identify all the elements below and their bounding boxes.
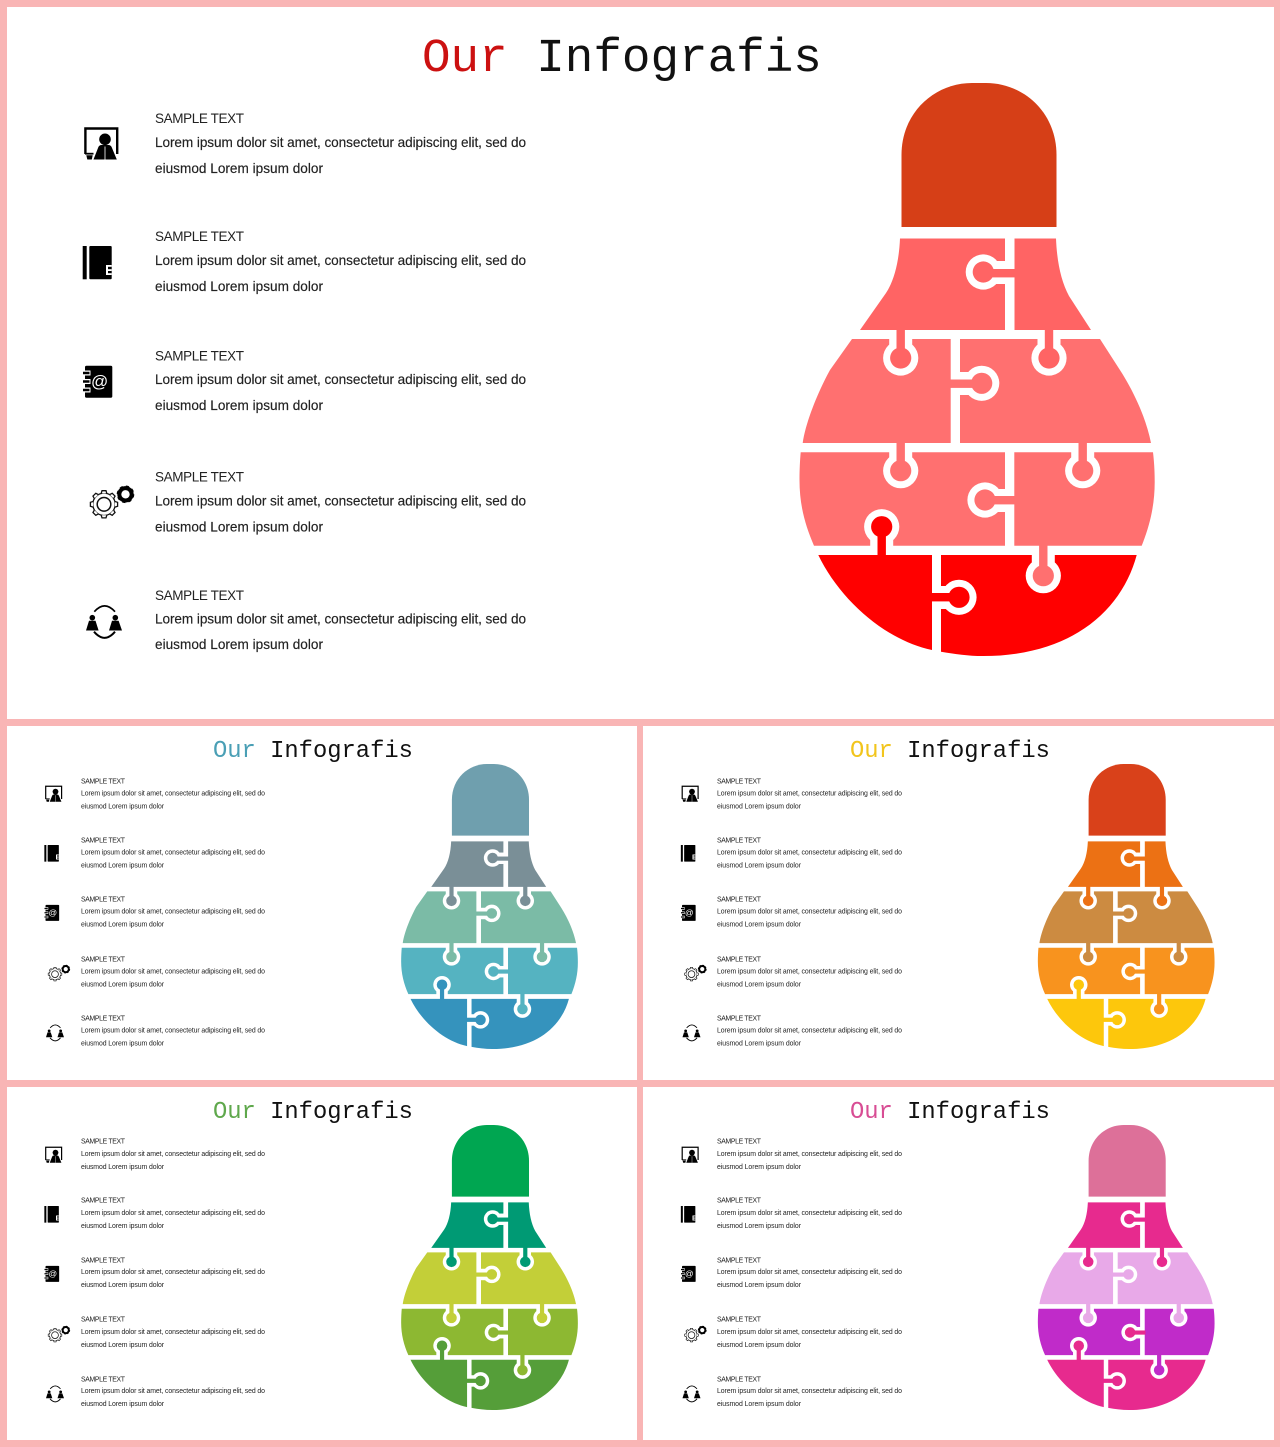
list item 1 xyxy=(682,778,902,810)
list item 1 xyxy=(46,1138,265,1171)
bulb neck pieces xyxy=(860,238,1091,330)
list item 4: SAMPLE TEXT xyxy=(717,1316,762,1324)
panel: pink slide xyxy=(643,1087,1274,1440)
list item 3: SAMPLE TEXT xyxy=(81,1258,126,1264)
list item 2: eiusmod Lorem ipsum dolor xyxy=(81,1223,165,1230)
list item 5 xyxy=(46,1016,265,1048)
list item 2: SAMPLE TEXT xyxy=(717,838,762,844)
bulb cap xyxy=(902,83,1056,227)
list item 2 xyxy=(83,229,526,294)
list item 3 xyxy=(44,1258,265,1289)
list item 2: SAMPLE TEXT xyxy=(155,229,244,244)
row 3 puzzle tabs xyxy=(1033,544,1054,586)
list item 1: Lorem ipsum dolor sit amet, consectetur adipiscing elit, sed do xyxy=(81,790,265,798)
list item 3: @ xyxy=(685,1268,694,1278)
neck puzzle tabs xyxy=(890,261,1060,369)
list item 2: Lorem ipsum dolor sit amet, consectetur adipiscing elit, sed do xyxy=(717,1210,902,1217)
list item 2 xyxy=(681,1198,902,1230)
puzzle light bulb: red xyxy=(800,83,1155,656)
list item 1: eiusmod Lorem ipsum dolor xyxy=(717,804,802,810)
list item 3: SAMPLE TEXT xyxy=(155,348,244,364)
puzzle light bulb: pink xyxy=(1038,1125,1215,1410)
list item 2 xyxy=(681,838,902,870)
row 4 puzzle tabs xyxy=(871,516,970,608)
title: Our Infografis xyxy=(213,1099,413,1126)
list item 2: SAMPLE TEXT xyxy=(81,838,126,844)
list item 5: SAMPLE TEXT xyxy=(81,1376,126,1384)
list item 1: Lorem ipsum dolor sit amet, consectetur adipiscing elit, sed do xyxy=(81,1151,265,1158)
list item 4: Lorem ipsum dolor sit amet, consectetur adipiscing elit, sed do xyxy=(155,494,526,508)
list item 2: Lorem ipsum dolor sit amet, consectetur adipiscing elit, sed do xyxy=(81,850,265,856)
list item 4: SAMPLE TEXT xyxy=(155,470,244,484)
list item 2: SAMPLE TEXT xyxy=(81,1198,126,1204)
bulb row 3 pieces xyxy=(800,452,1155,546)
list item 5: Lorem ipsum dolor sit amet, consectetur adipiscing elit, sed do xyxy=(81,1028,265,1034)
list item 3: eiusmod Lorem ipsum dolor xyxy=(717,922,802,928)
list item 5: SAMPLE TEXT xyxy=(717,1376,762,1384)
list item 3: @ xyxy=(685,908,694,918)
list item 2: Lorem ipsum dolor sit amet, consectetur adipiscing elit, sed do xyxy=(155,253,526,268)
list item 5 xyxy=(682,1016,902,1048)
list item 3: eiusmod Lorem ipsum dolor xyxy=(717,1282,802,1289)
list item 2: eiusmod Lorem ipsum dolor xyxy=(717,862,802,870)
list item 4 xyxy=(90,470,526,534)
panel: orange slide xyxy=(643,726,1274,1080)
list item 1: SAMPLE TEXT xyxy=(81,778,126,786)
interlock tab into row 3 xyxy=(974,489,1016,511)
list item 3: Lorem ipsum dolor sit amet, consectetur adipiscing elit, sed do xyxy=(717,1269,902,1276)
list item 1: Lorem ipsum dolor sit amet, consectetur adipiscing elit, sed do xyxy=(155,135,526,150)
list item 2 xyxy=(44,1198,265,1230)
list item 1 xyxy=(85,111,526,176)
list item 4 xyxy=(48,956,265,988)
list item 1 xyxy=(682,1138,902,1171)
list item 5: SAMPLE TEXT xyxy=(81,1016,126,1022)
list item 3: @ xyxy=(91,372,108,391)
list item 5: Lorem ipsum dolor sit amet, consectetur adipiscing elit, sed do xyxy=(717,1028,902,1034)
list item 4: SAMPLE TEXT xyxy=(81,956,126,964)
list item 4: eiusmod Lorem ipsum dolor xyxy=(81,1342,165,1349)
list item 1: Lorem ipsum dolor sit amet, consectetur adipiscing elit, sed do xyxy=(717,1151,902,1158)
panel: main slide xyxy=(7,7,1274,719)
list item 1: SAMPLE TEXT xyxy=(81,1138,126,1146)
puzzle light bulb: blue xyxy=(401,764,578,1049)
list item 4: eiusmod Lorem ipsum dolor xyxy=(81,982,165,988)
list item 2: eiusmod Lorem ipsum dolor xyxy=(155,279,323,294)
title: Our Infografis xyxy=(850,1099,1050,1126)
list item 5: eiusmod Lorem ipsum dolor xyxy=(155,637,323,652)
list item 3 xyxy=(83,348,526,413)
list item 1: eiusmod Lorem ipsum dolor xyxy=(717,1164,802,1171)
list item 4 xyxy=(685,1316,902,1349)
list item 2: Lorem ipsum dolor sit amet, consectetur adipiscing elit, sed do xyxy=(717,850,902,856)
list item 3: @ xyxy=(48,1268,57,1278)
list item 4 xyxy=(48,1316,265,1349)
list item 4: Lorem ipsum dolor sit amet, consectetur adipiscing elit, sed do xyxy=(717,968,902,976)
bulb row 2 pieces xyxy=(803,339,1151,443)
panel: green slide xyxy=(7,1087,637,1440)
list item 1: SAMPLE TEXT xyxy=(155,111,244,126)
list item 4: Lorem ipsum dolor sit amet, consectetur adipiscing elit, sed do xyxy=(81,968,265,976)
title: Our Infografis xyxy=(422,32,822,86)
list item 5 xyxy=(682,1376,902,1408)
list item 5 xyxy=(86,588,526,652)
list item 3: eiusmod Lorem ipsum dolor xyxy=(155,398,323,413)
list item 3: SAMPLE TEXT xyxy=(717,1258,762,1264)
list item 1: eiusmod Lorem ipsum dolor xyxy=(81,804,165,810)
list item 3 xyxy=(44,896,265,928)
bulb row 4 pieces xyxy=(818,555,1137,656)
list item 1 xyxy=(46,778,265,810)
list item 4: eiusmod Lorem ipsum dolor xyxy=(155,520,323,534)
list item 3: Lorem ipsum dolor sit amet, consectetur adipiscing elit, sed do xyxy=(81,1269,265,1276)
list item 3: eiusmod Lorem ipsum dolor xyxy=(81,1282,165,1289)
list item 1: SAMPLE TEXT xyxy=(717,1138,762,1146)
list item 4: Lorem ipsum dolor sit amet, consectetur adipiscing elit, sed do xyxy=(717,1329,902,1336)
list item 2 xyxy=(44,838,265,870)
list item 4: SAMPLE TEXT xyxy=(717,956,762,964)
list item 2: Lorem ipsum dolor sit amet, consectetur adipiscing elit, sed do xyxy=(81,1210,265,1217)
list item 3: Lorem ipsum dolor sit amet, consectetur adipiscing elit, sed do xyxy=(81,908,265,916)
list item 3 xyxy=(681,1258,902,1289)
list item 3: @ xyxy=(48,908,57,918)
title: Our Infografis xyxy=(850,738,1050,765)
list item 5: Lorem ipsum dolor sit amet, consectetur adipiscing elit, sed do xyxy=(81,1388,265,1395)
list item 3: Lorem ipsum dolor sit amet, consectetur adipiscing elit, sed do xyxy=(717,908,902,916)
list item 4: eiusmod Lorem ipsum dolor xyxy=(717,1342,802,1349)
puzzle socket outlines xyxy=(864,254,1100,615)
list item 4 xyxy=(685,956,902,988)
list item 3 xyxy=(681,896,902,928)
list item 1: eiusmod Lorem ipsum dolor xyxy=(155,161,323,176)
list item 3: SAMPLE TEXT xyxy=(81,896,126,904)
row 2 puzzle tabs xyxy=(890,373,1093,481)
list item 2: eiusmod Lorem ipsum dolor xyxy=(81,862,165,870)
list item 3: eiusmod Lorem ipsum dolor xyxy=(81,922,165,928)
puzzle light bulb: green xyxy=(401,1125,578,1410)
list item 3: SAMPLE TEXT xyxy=(717,896,762,904)
list item 5: eiusmod Lorem ipsum dolor xyxy=(81,1040,165,1048)
list item 5: SAMPLE TEXT xyxy=(717,1016,762,1022)
list item 1: SAMPLE TEXT xyxy=(717,778,762,786)
list item 5: Lorem ipsum dolor sit amet, consectetur adipiscing elit, sed do xyxy=(717,1388,902,1395)
list item 5: SAMPLE TEXT xyxy=(155,588,244,603)
list item 4: Lorem ipsum dolor sit amet, consectetur adipiscing elit, sed do xyxy=(81,1329,265,1336)
puzzle light bulb: orange xyxy=(1038,764,1215,1049)
list item 5: Lorem ipsum dolor sit amet, consectetur adipiscing elit, sed do xyxy=(155,612,526,626)
list item 3: Lorem ipsum dolor sit amet, consectetur adipiscing elit, sed do xyxy=(155,372,526,387)
list item 4: SAMPLE TEXT xyxy=(81,1316,126,1324)
list item 5: eiusmod Lorem ipsum dolor xyxy=(717,1401,802,1408)
list item 1: Lorem ipsum dolor sit amet, consectetur adipiscing elit, sed do xyxy=(717,790,902,798)
list item 5: eiusmod Lorem ipsum dolor xyxy=(81,1401,165,1408)
list item 2: SAMPLE TEXT xyxy=(717,1198,762,1204)
title: Our Infografis xyxy=(213,738,413,765)
list item 5: eiusmod Lorem ipsum dolor xyxy=(717,1040,802,1048)
list item 2: eiusmod Lorem ipsum dolor xyxy=(717,1223,802,1230)
list item 1: eiusmod Lorem ipsum dolor xyxy=(81,1164,165,1171)
list item 4: eiusmod Lorem ipsum dolor xyxy=(717,982,802,988)
list item 5 xyxy=(46,1376,265,1408)
panel: blue slide xyxy=(7,726,637,1080)
